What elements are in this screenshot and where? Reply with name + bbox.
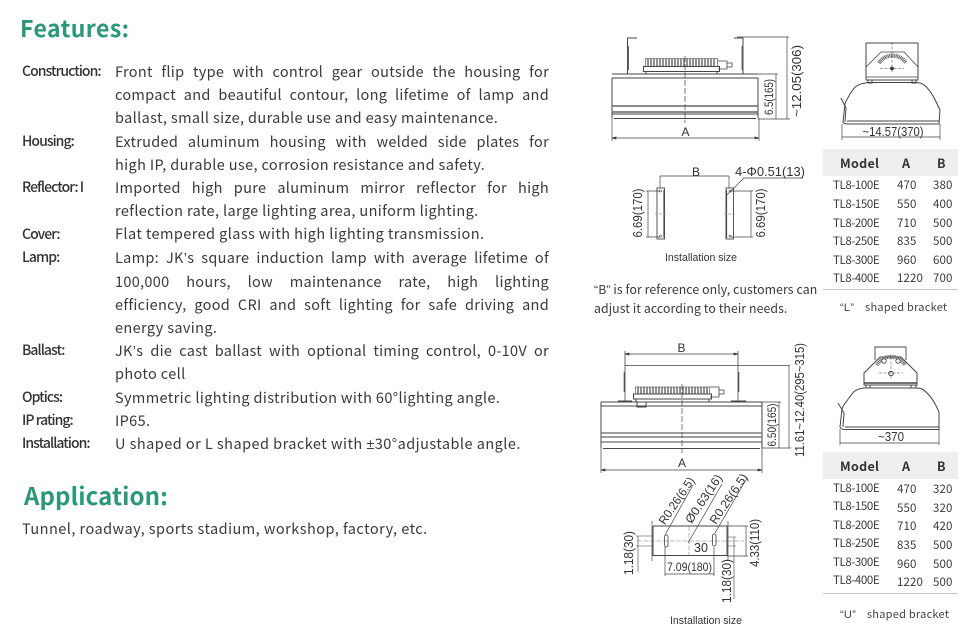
L bracket table: 500 [933, 215, 952, 231]
U bracket table: 320 [933, 500, 952, 516]
L bracket table: 960 [897, 252, 916, 268]
label: installation: Installation: [22, 433, 90, 453]
U bracket table [833, 456, 952, 590]
U bracket table: B [937, 456, 946, 475]
U bracket installation size drawing: 1.18(30) [720, 559, 734, 603]
L bracket front drawing: ~12.05(306) [789, 45, 804, 117]
text: reflector: reflection rate, large lighting area, uniform lighting. [115, 200, 479, 221]
text: lamp: efficiency, good CRI and soft lighting for safe driving and [115, 294, 549, 315]
table bars [823, 149, 958, 176]
U bracket side drawing [838, 347, 939, 445]
L bracket table: 700 [933, 270, 952, 286]
U bracket front drawing: B [677, 341, 686, 355]
application heading: Application: [24, 477, 168, 512]
U bracket table: TL8-400E [833, 572, 879, 588]
U bracket table: TL8-150E [833, 498, 879, 514]
text: reflector [115, 177, 549, 221]
U bracket table: 960 [897, 556, 916, 572]
text: lamp: 100,000 hours, low maintenance rate, high lighting [115, 271, 549, 292]
L bracket table: B [937, 153, 946, 172]
U bracket table: 710 [897, 518, 916, 534]
U bracket side drawing: ~370 [878, 429, 904, 444]
label: housing: Housing: [22, 131, 74, 151]
L bracket table: 600 [933, 252, 952, 268]
L bracket table: TL8-300E [833, 252, 879, 268]
text: lamp: energy saving. [115, 317, 217, 338]
U bracket installation size drawing: 1.18(30) [622, 531, 636, 575]
U bracket table: TL8-200E [833, 517, 879, 533]
U bracket caption: “U” shaped bracket [840, 606, 949, 622]
U bracket table: TL8-250E [833, 535, 879, 551]
L bracket installation size drawing: B [692, 165, 700, 179]
L bracket table: TL8-400E [833, 270, 879, 286]
U bracket installation size drawing: Installation size [670, 615, 742, 627]
L bracket table: TL8-100E [833, 177, 879, 193]
text: optics: Symmetric lighting distribution with 60°lighting angle. [115, 387, 500, 408]
text: ballast: photo cell [115, 363, 186, 384]
L bracket side drawing: ~14.57(370) [862, 124, 924, 139]
U bracket table: TL8-100E [833, 480, 879, 496]
text: construction: ballast, small size, durable use and easy maintenance. [115, 107, 498, 128]
U bracket table: TL8-300E [833, 554, 879, 570]
U bracket table: A [902, 456, 910, 475]
L bracket table: 835 [897, 233, 916, 249]
text: housing [115, 131, 549, 175]
U bracket table: 500 [933, 556, 952, 572]
L bracket table: 400 [933, 196, 952, 212]
U bracket table: 1220 [897, 574, 923, 590]
text: construction: Front flip type with control gear outside the housing for [115, 61, 549, 82]
L bracket table: TL8-200E [833, 215, 879, 231]
note on dimension B: adjust it according to their needs. [594, 299, 787, 317]
label: cover: Cover: [22, 224, 60, 244]
L bracket installation size drawing: 4-Φ0.51(13) [735, 164, 805, 179]
U bracket installation size drawing: R0.26(6.5) [656, 474, 698, 527]
text: construction [115, 61, 549, 128]
text: lamp [115, 247, 550, 338]
L bracket table: 380 [933, 177, 952, 193]
U bracket installation size drawing: Ø0.63(16) [682, 472, 725, 526]
U bracket table: 420 [933, 518, 952, 534]
note on dimension B: “B” is for reference only, customers can [594, 280, 817, 298]
U bracket front drawing [601, 341, 807, 473]
U bracket table: 470 [897, 481, 916, 497]
U bracket table: 500 [933, 574, 952, 590]
U bracket installation size drawing: 4.33(110) [748, 519, 762, 567]
L bracket table: 710 [897, 215, 916, 231]
label: construction: Construction: [22, 61, 101, 81]
features heading: Features: [20, 10, 130, 44]
L bracket table: 470 [897, 177, 916, 193]
L bracket table [833, 153, 952, 286]
U bracket table: Model [840, 456, 879, 475]
L bracket installation size drawing [631, 164, 805, 264]
L bracket table: Model [840, 153, 879, 172]
L bracket front drawing: 6.5(165) [764, 79, 776, 115]
text: housing: high IP, durable use, corrosion resistance and safety. [115, 154, 485, 175]
note on dimension B [594, 280, 817, 317]
U bracket front drawing: A [678, 456, 686, 470]
L bracket installation size drawing: Installation size [665, 252, 737, 264]
text: construction: compact and beautiful contour, long lifetime of lamp and [115, 84, 549, 105]
U bracket front drawing: 11.61~12.40(295~315) [792, 343, 807, 457]
L bracket installation size drawing: 6.69(170) [754, 188, 768, 238]
L bracket table: TL8-250E [833, 233, 879, 249]
application text: Tunnel, roadway, sports stadium, workshop, factory, etc. [22, 518, 428, 539]
L bracket side drawing [841, 42, 940, 140]
text: ballast: JK’s die cast ballast with optional timing control, 0-10V or [115, 340, 549, 361]
text: ip rating: IP65. [115, 410, 150, 431]
text: ballast [115, 340, 549, 384]
L bracket table: A [902, 153, 910, 172]
U bracket installation size drawing: 7.09(180) [667, 560, 712, 574]
label: ip rating: IP rating: [22, 410, 73, 430]
L bracket table: 550 [897, 196, 916, 212]
L bracket table: TL8-150E [833, 196, 879, 212]
text: lamp: Lamp: JK’s square induction lamp with average lifetime of [115, 247, 549, 268]
L bracket front drawing: A [681, 125, 690, 139]
U bracket table: 500 [933, 537, 952, 553]
text: reflector: Imported high pure aluminum mirror reflector for high [115, 177, 549, 198]
U bracket installation size drawing [622, 471, 762, 627]
features list [22, 61, 550, 454]
U bracket installation size drawing: R0.26(6.5) [707, 471, 751, 527]
U bracket installation size drawing: 30 [694, 541, 708, 555]
U bracket table: 550 [897, 500, 916, 516]
L bracket installation size drawing: 6.69(170) [631, 188, 645, 238]
text: cover: Flat tempered glass with high lighting transmission. [115, 223, 484, 244]
U bracket table: 835 [897, 537, 916, 553]
L bracket front drawing [612, 37, 804, 141]
text: installation: U shaped or L shaped bracket with ±30°adjustable angle. [115, 433, 521, 454]
label: optics: Optics: [22, 387, 62, 407]
L bracket caption: “L” shaped bracket [840, 299, 947, 315]
text: housing: Extruded aluminum housing with welded side plates for [115, 131, 549, 152]
label: lamp: Lamp: [22, 247, 59, 267]
U bracket front drawing: 6.50(165) [767, 403, 779, 446]
label: ballast: Ballast: [22, 340, 64, 360]
L bracket table: 500 [933, 233, 952, 249]
label: reflector: Reflector: I [22, 177, 83, 197]
U bracket table: 320 [933, 481, 952, 497]
L bracket table: 1220 [897, 270, 923, 286]
